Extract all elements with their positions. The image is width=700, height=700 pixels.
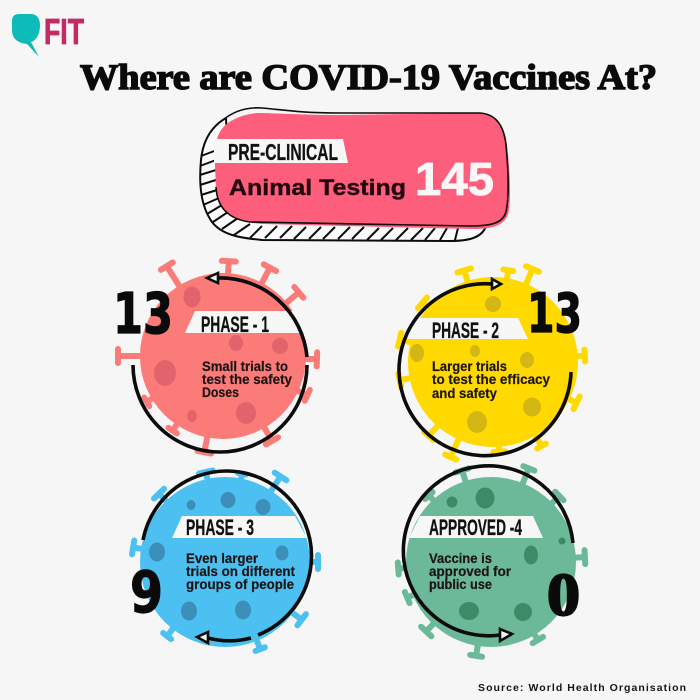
count 9: 9 bbox=[130, 560, 163, 626]
blotches bbox=[154, 286, 288, 424]
description bbox=[202, 359, 292, 400]
panel: phase 1 bbox=[113, 261, 317, 454]
logo: FIT: FIT bbox=[44, 11, 84, 52]
pre-clinical banner bbox=[214, 139, 348, 163]
count 145: 145 bbox=[415, 153, 494, 205]
description: groups of people bbox=[186, 577, 294, 592]
banner label: PHASE - 1 bbox=[201, 312, 269, 337]
description: Larger trials bbox=[432, 359, 507, 374]
description bbox=[186, 551, 295, 592]
hatched backing shape bbox=[200, 118, 486, 241]
virus body bbox=[140, 273, 306, 439]
banner bbox=[185, 311, 303, 333]
logo: FIT bbox=[12, 11, 84, 57]
banner label: APPROVED -4 bbox=[429, 515, 522, 540]
panel: approved bbox=[398, 466, 585, 657]
panel: pre-clinical bbox=[200, 108, 510, 241]
description: to test the efficacy bbox=[432, 372, 550, 387]
cycle arrow bbox=[403, 466, 573, 641]
banner label: PHASE - 3 bbox=[186, 515, 254, 540]
banner bbox=[172, 516, 307, 538]
banner bbox=[407, 318, 528, 339]
banner bbox=[409, 516, 543, 538]
animal testing label: Animal Testing bbox=[229, 175, 406, 200]
pre-clinical label: PRE-CLINICAL bbox=[228, 139, 338, 165]
pill outline bbox=[216, 108, 508, 226]
count 13: 13 bbox=[113, 282, 173, 347]
virus body bbox=[140, 477, 310, 647]
description: Small trials to bbox=[202, 359, 288, 374]
cycle arrow bbox=[143, 471, 311, 643]
description: and safety bbox=[432, 386, 497, 401]
description: Doses bbox=[202, 385, 239, 400]
description: Vaccine is bbox=[429, 551, 492, 566]
pink pill bbox=[215, 113, 510, 229]
spikes bbox=[132, 471, 318, 651]
panel: phase 2 bbox=[398, 266, 585, 459]
cycle arrow bbox=[399, 279, 571, 456]
count 0: 0 bbox=[547, 562, 580, 628]
description: Even larger bbox=[186, 551, 259, 566]
virus body bbox=[408, 277, 578, 447]
description bbox=[432, 359, 550, 401]
description: approved for bbox=[429, 564, 512, 579]
title: Where are COVID-19 Vaccines At? bbox=[80, 57, 657, 97]
panel: phase 3 bbox=[130, 471, 318, 651]
source: Source: World Health Organisation bbox=[478, 682, 686, 694]
banner label: PHASE - 2 bbox=[432, 318, 499, 343]
virus body bbox=[406, 477, 576, 647]
description: test the safety bbox=[202, 372, 292, 387]
description: trials on different bbox=[186, 564, 295, 579]
blotches bbox=[446, 488, 566, 621]
description bbox=[429, 551, 512, 592]
spikes bbox=[398, 466, 585, 657]
blotches bbox=[410, 296, 541, 433]
cycle arrow bbox=[133, 273, 307, 452]
spikes bbox=[398, 266, 585, 459]
description: public use bbox=[429, 577, 492, 592]
spikes bbox=[118, 261, 317, 454]
count 13: 13 bbox=[527, 282, 582, 345]
blotches bbox=[149, 492, 288, 620]
